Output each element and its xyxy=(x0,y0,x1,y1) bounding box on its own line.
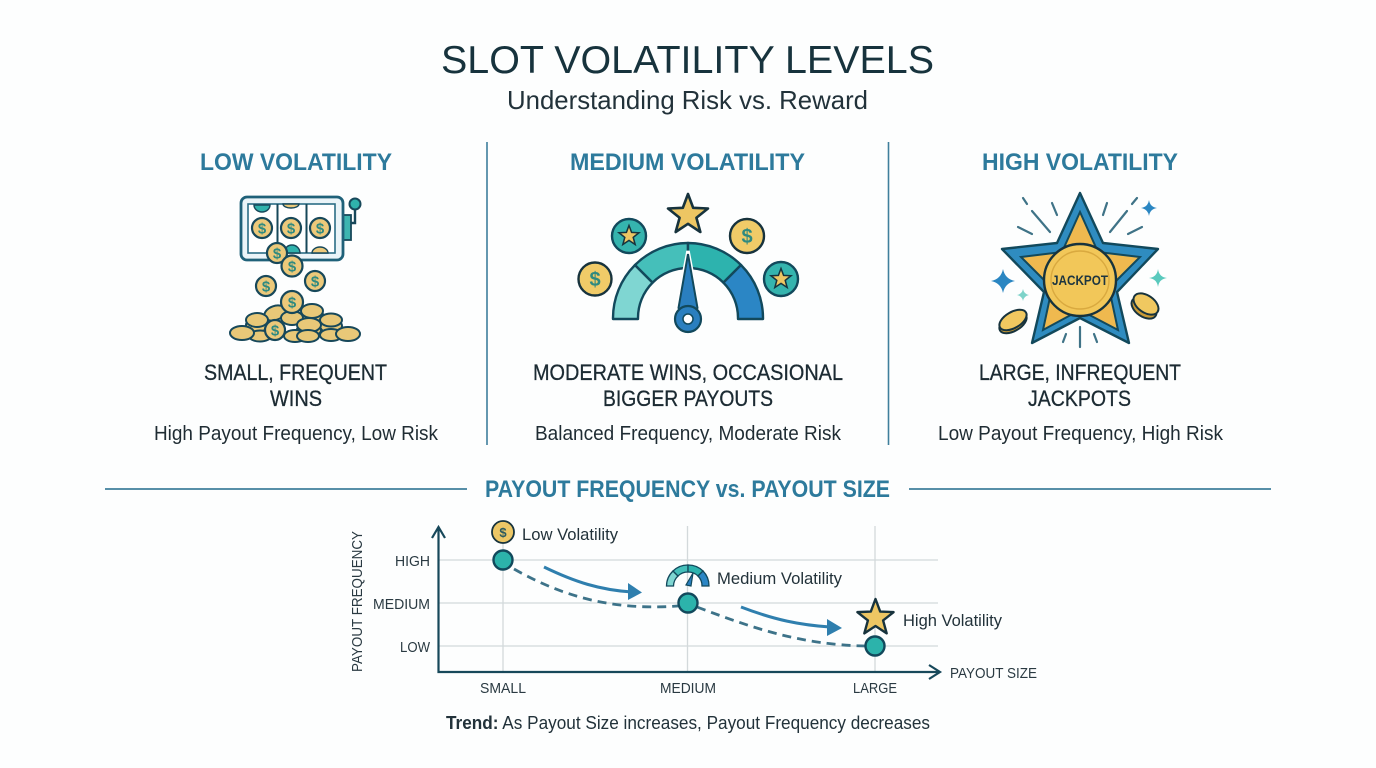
trend note: Trend: As Payout Size increases, Payout Frequency decreases xyxy=(446,713,930,733)
y axis title: PAYOUT FREQUENCY xyxy=(349,531,366,672)
y axis labels: HIGH xyxy=(395,553,430,570)
falling coins xyxy=(256,243,325,313)
gauge arc xyxy=(613,243,763,319)
x axis labels: LARGE xyxy=(853,680,897,697)
reel coins: $ xyxy=(287,220,296,238)
dollar coin left: $ xyxy=(589,269,601,291)
dashed trend curve xyxy=(514,569,866,646)
data point: low volatility xyxy=(492,521,618,570)
description: low volatility: WINS xyxy=(270,386,322,411)
panel: low volatility xyxy=(154,149,439,445)
dollar coin right: $ xyxy=(741,226,753,248)
description: high volatility xyxy=(979,360,1181,411)
reel coins: $ xyxy=(316,220,325,238)
sparkles xyxy=(991,200,1167,301)
description: medium volatility: MODERATE WINS, OCCASIONAL xyxy=(533,360,843,385)
y axis labels: LOW xyxy=(400,639,431,656)
heading: high volatility: HIGH VOLATILITY xyxy=(982,149,1178,176)
data point: high volatility xyxy=(857,599,1002,656)
description: high volatility: LARGE, INFREQUENT xyxy=(979,360,1181,385)
reel coins xyxy=(252,218,330,238)
falling coins: $ xyxy=(262,278,271,296)
reel coins: $ xyxy=(258,220,267,238)
slot machine body xyxy=(241,197,343,260)
icon: jackpot star xyxy=(991,193,1167,347)
star badge right xyxy=(764,262,798,296)
risk note: high volatility: Low Payout Frequency, High Risk xyxy=(938,423,1224,445)
line chart: payout frequency vs payout size xyxy=(349,521,1037,697)
data point: low volatility: Low Volatility xyxy=(522,525,618,544)
dollar coin left xyxy=(578,262,612,296)
falling coins: $ xyxy=(273,246,282,262)
falling coins: $ xyxy=(288,294,297,312)
x axis labels: SMALL xyxy=(480,680,526,697)
description: low volatility: SMALL, FREQUENT xyxy=(204,360,387,385)
panel: high volatility xyxy=(938,149,1224,445)
description: low volatility xyxy=(204,360,387,411)
outer blue star xyxy=(1002,193,1158,343)
risk note: low volatility: High Payout Frequency, Low Risk xyxy=(154,423,439,445)
y axis labels xyxy=(373,553,431,656)
top star xyxy=(668,194,708,232)
data point: medium volatility: Medium Volatility xyxy=(717,569,842,588)
data point: high volatility: High Volatility xyxy=(903,611,1002,630)
y axis labels: MEDIUM xyxy=(373,596,430,613)
jackpot coin xyxy=(1044,244,1116,316)
burst rays xyxy=(1018,198,1142,347)
chart axes xyxy=(432,527,940,679)
heading: medium volatility: MEDIUM VOLATILITY xyxy=(570,149,805,176)
title: SLOT VOLATILITY LEVELS xyxy=(441,39,934,82)
panel: medium volatility xyxy=(533,149,843,445)
section heading: payout frequency vs payout size: PAYOUT FREQUENCY vs. PAYOUT SIZE xyxy=(485,476,890,503)
dollar coin right xyxy=(730,219,764,253)
description: high volatility: JACKPOTS xyxy=(1028,386,1131,411)
slot machine lever xyxy=(343,198,360,240)
risk note: medium volatility: Balanced Frequency, Moderate Risk xyxy=(535,423,842,445)
x axis labels xyxy=(480,680,897,697)
data point: medium volatility xyxy=(666,565,842,612)
trend arrow: low to medium xyxy=(544,567,642,600)
x axis labels: MEDIUM xyxy=(660,680,716,697)
trend arrow: medium to high xyxy=(741,607,842,636)
x axis title: PAYOUT SIZE xyxy=(950,665,1037,682)
heading: low volatility: LOW VOLATILITY xyxy=(200,149,392,176)
falling coins: $ xyxy=(288,258,297,276)
coin pile: $ xyxy=(271,322,280,340)
star badge left xyxy=(612,219,646,253)
loose coins xyxy=(996,289,1162,337)
description: medium volatility xyxy=(533,360,843,411)
subtitle: Understanding Risk vs. Reward xyxy=(507,85,868,115)
data point: low volatility: $ xyxy=(499,525,507,540)
description: medium volatility: BIGGER PAYOUTS xyxy=(603,386,773,411)
falling coins: $ xyxy=(311,274,320,290)
icon: slot machine with falling coins xyxy=(230,197,360,342)
jackpot coin: JACKPOT xyxy=(1052,273,1109,288)
icon: gauge with coins and stars xyxy=(578,194,798,332)
coin pile xyxy=(230,303,360,342)
inner gold star xyxy=(1021,212,1140,330)
gauge needle xyxy=(675,251,701,332)
